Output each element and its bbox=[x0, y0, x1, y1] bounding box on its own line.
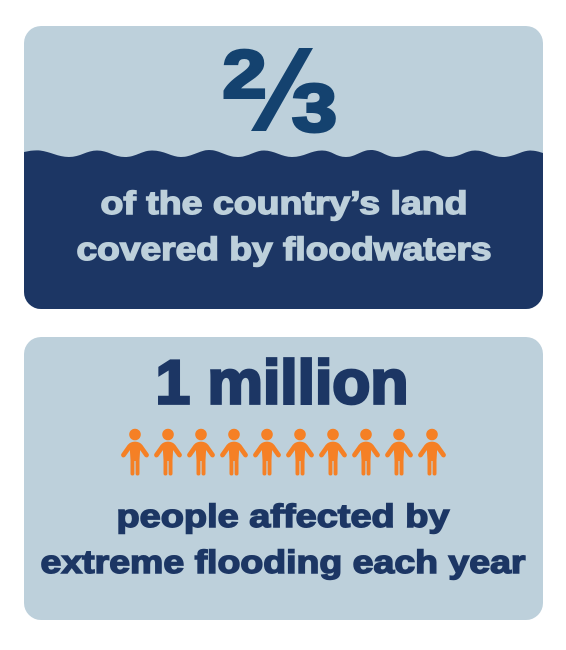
icon row: ten people bbox=[124, 429, 444, 476]
fraction two thirds: 2 bbox=[222, 36, 266, 112]
caption: people affected bbox=[40, 498, 526, 580]
fraction two thirds bbox=[222, 36, 337, 146]
fraction two thirds: 3 bbox=[292, 70, 337, 146]
caption: land covered bbox=[76, 185, 491, 267]
water wave bbox=[24, 150, 543, 309]
heading: 1 million: 1 million bbox=[156, 348, 408, 418]
panel: people affected bbox=[24, 337, 543, 620]
caption: people affected: people affected by bbox=[116, 498, 450, 534]
caption: land covered: covered by floodwaters bbox=[76, 231, 491, 267]
caption: people affected: extreme flooding each year bbox=[40, 544, 526, 580]
panel: land covered by floodwaters bbox=[24, 26, 543, 309]
caption: land covered: of the country’s land bbox=[100, 185, 468, 221]
